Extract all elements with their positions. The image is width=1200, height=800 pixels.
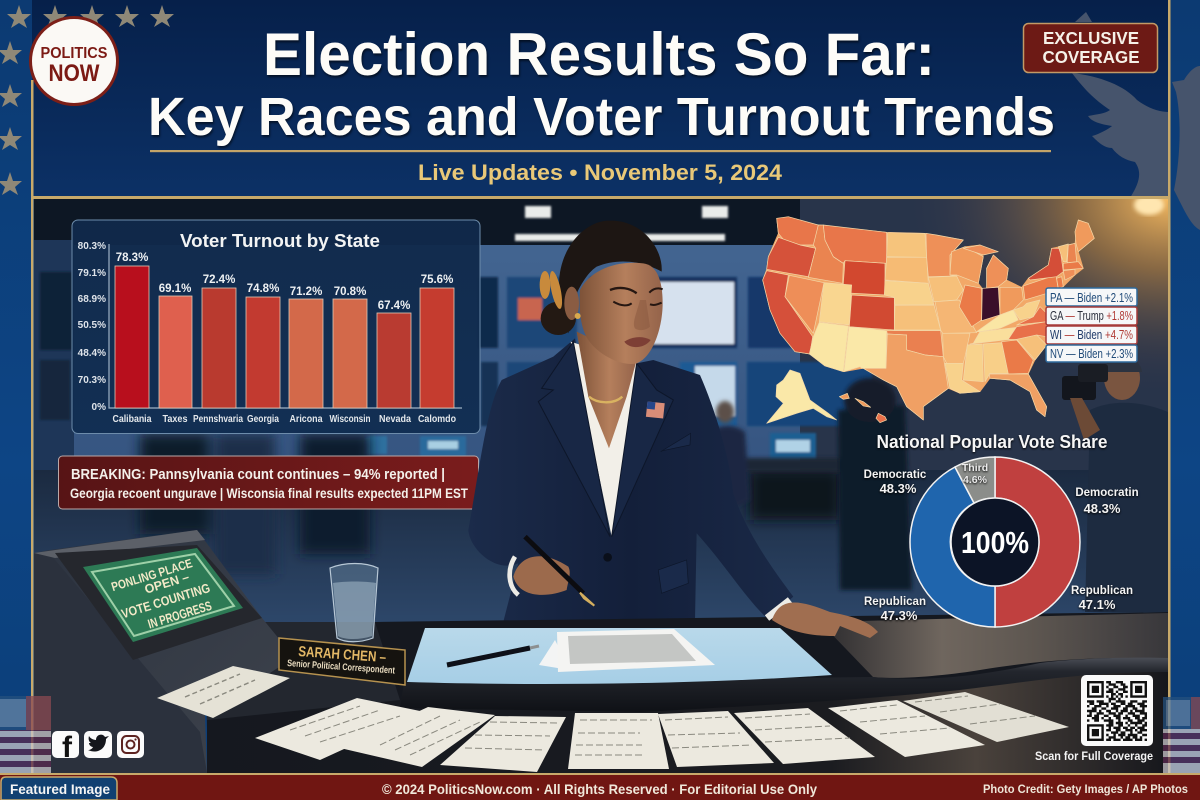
bars	[115, 266, 454, 408]
donut labels: Republican	[1071, 585, 1133, 597]
ballot 5	[658, 711, 774, 767]
bar category labels: Calomdo	[418, 414, 456, 425]
bar category labels: Taxes	[162, 414, 188, 425]
icon: instagram	[117, 731, 144, 758]
left cuff	[510, 557, 518, 595]
name plate: Sarah Chen: Senior Political Correspondent	[287, 658, 396, 677]
y axis labels: 70.3%	[78, 375, 106, 386]
donut labels	[864, 462, 1139, 623]
lamp	[1134, 195, 1164, 215]
bar value labels: 72.4%	[203, 274, 235, 286]
pen on glass	[447, 646, 539, 665]
necklace	[589, 397, 622, 402]
jacket	[468, 338, 793, 622]
status screen: VOTE COUNTING	[120, 580, 212, 621]
ballot 3	[440, 716, 566, 772]
status screen: PONLING PLACE	[110, 556, 194, 594]
title rule	[150, 150, 1051, 152]
name plate: Sarah Chen	[279, 638, 405, 685]
machine body	[34, 530, 290, 773]
earring	[575, 313, 581, 319]
presenter right hand	[767, 600, 878, 638]
flag: bottom left	[0, 696, 51, 773]
machine top edge	[34, 530, 205, 558]
ballots	[255, 692, 1069, 772]
bar value labels: 70.8%	[334, 286, 366, 298]
shirt	[571, 342, 637, 537]
footer tab: Featured Image	[10, 781, 110, 797]
bar value labels	[116, 252, 453, 312]
donut chart panel: national popular vote share	[864, 431, 1139, 627]
donut labels: Third	[962, 462, 988, 474]
y axis labels: 0%	[92, 402, 106, 413]
QR code	[1081, 675, 1153, 746]
donut labels: Republican	[864, 596, 926, 608]
desk shelf	[207, 670, 1168, 773]
logo: Politics Now	[30, 18, 118, 104]
breaking news ticker: Georgia recoent ungurave | Wisconsia final results expected 11PM EST	[70, 485, 468, 501]
title: Election Results So Far:	[263, 21, 935, 88]
ballot 7	[828, 700, 985, 757]
lapels	[538, 342, 673, 537]
badge: exclusive coverage: COVERAGE	[1042, 47, 1140, 67]
body front face	[34, 553, 207, 773]
bar value labels: 75.6%	[421, 274, 453, 286]
icon: facebook: f	[62, 731, 73, 764]
water glass	[330, 564, 378, 642]
left hand	[513, 556, 570, 595]
face	[580, 263, 663, 364]
machine bezel	[55, 545, 262, 660]
US turnout map	[763, 217, 1094, 423]
bar category labels: Nevada	[379, 414, 411, 425]
title: Key Races and Voter Turnout Trends	[148, 87, 1055, 147]
icon: decorative stars	[0, 5, 174, 195]
bar category labels: Calibania	[112, 414, 152, 425]
donut labels: 47.1%	[1079, 597, 1116, 612]
bar value labels: 71.2%	[290, 286, 322, 298]
ballot 1	[255, 698, 425, 760]
donut slices	[910, 457, 1080, 627]
y axis labels: 50.5%	[78, 320, 106, 331]
pocket	[658, 433, 691, 593]
flag: bottom right	[1163, 697, 1200, 773]
voting machine	[34, 530, 290, 773]
hair	[559, 221, 662, 333]
scene: newsroom photo	[34, 195, 1168, 640]
bar category labels	[112, 414, 456, 425]
y axis labels	[78, 241, 106, 413]
camera operator	[1062, 356, 1168, 612]
header band	[32, 0, 1170, 198]
footer copyright: © 2024 PoliticsNow.com · All Rights Reserved · For Editorial Use Only	[382, 781, 817, 797]
chart title: Voter Turnout by State	[180, 230, 380, 251]
y axis labels: 48.4%	[78, 348, 106, 359]
document on glass	[539, 629, 715, 672]
badge: exclusive coverage	[1024, 24, 1158, 72]
wall	[74, 245, 800, 466]
map base silhouette	[763, 218, 1094, 420]
callout: PA: PA — Biden +2.1%	[1050, 290, 1133, 305]
status screen	[83, 548, 243, 642]
donut labels: 4.6%	[963, 474, 988, 486]
donut labels: 48.3%	[880, 481, 917, 496]
QR caption: Scan for Full Coverage	[1035, 749, 1153, 763]
callout: NV: NV — Biden +2.3%	[1050, 346, 1133, 361]
mouth	[624, 337, 651, 347]
donut centre value: 100%	[961, 525, 1029, 560]
eyes	[610, 288, 663, 305]
title	[148, 21, 1055, 147]
ceiling lights	[515, 206, 728, 241]
desk upper frame	[375, 612, 1168, 700]
button	[603, 553, 612, 562]
right dark area	[800, 199, 1168, 470]
icon: eagle silhouette	[1072, 12, 1200, 230]
ballot 4	[568, 713, 669, 769]
bar chart panel: voter turnout by state	[72, 220, 480, 434]
pen	[525, 537, 583, 593]
icon: twitter	[84, 731, 112, 758]
logo: Politics Now: POLITICS	[40, 45, 108, 62]
nose shadow	[634, 300, 650, 330]
donut labels: Democratin	[1075, 487, 1139, 499]
name plate: Sarah Chen: SARAH CHEN –	[298, 644, 387, 666]
callout: GA: GA — Trump +1.8%	[1050, 308, 1133, 323]
donut labels: 48.3%	[1084, 501, 1121, 516]
logo: Politics Now: NOW	[48, 60, 100, 87]
ceiling	[34, 199, 800, 245]
status screen: OPEN –	[143, 570, 191, 597]
anchor desk	[205, 612, 1168, 773]
machine paper	[157, 666, 290, 718]
background desks and staff	[140, 434, 840, 574]
donut title: National Popular Vote Share	[876, 431, 1108, 452]
ballot 8	[903, 692, 1069, 742]
bar category labels: Wisconsin	[330, 414, 370, 425]
subtitle: Live Updates • November 5, 2024	[418, 160, 782, 185]
footer tab	[1, 777, 117, 800]
ear	[564, 287, 579, 320]
desk surface right	[820, 613, 1168, 678]
hair bun	[541, 302, 576, 335]
desk front band	[400, 658, 1168, 712]
bar category labels: Georgia	[247, 414, 279, 425]
y axis labels: 79.1%	[78, 268, 106, 279]
state result callouts	[1046, 288, 1137, 362]
bar category labels: Aricona	[290, 414, 323, 425]
background staff	[710, 378, 912, 590]
ballot 2	[340, 707, 495, 767]
ballot 6	[734, 708, 875, 764]
social icons	[52, 731, 144, 764]
donut labels: Democratic	[864, 469, 927, 481]
neck and chest	[577, 332, 637, 448]
footer credit: Photo Credit: Gety Images / AP Photos	[983, 782, 1188, 796]
bar value labels: 78.3%	[116, 252, 148, 264]
axes	[109, 244, 462, 408]
callout: WI: WI — Biden +4.7%	[1050, 327, 1133, 342]
glass monitor	[407, 628, 832, 684]
warm light glow	[952, 199, 1168, 360]
presenter: Sarah Chen	[468, 221, 793, 622]
desk left surface	[205, 622, 410, 730]
breaking news ticker	[58, 456, 478, 509]
bar value labels: 69.1%	[159, 283, 191, 295]
bar category labels: Pennshvaria	[193, 414, 243, 425]
y axis labels: 68.9%	[78, 294, 106, 305]
monitors	[40, 272, 872, 459]
footer bar	[0, 773, 1200, 800]
floor	[34, 470, 1158, 622]
bar value labels: 67.4%	[378, 300, 410, 312]
donut labels: 47.3%	[881, 608, 918, 623]
y axis labels: 80.3%	[78, 241, 106, 252]
badge: exclusive coverage: EXCLUSIVE	[1043, 28, 1139, 48]
status screen: IN PROGRESS	[146, 598, 214, 632]
hair clip	[540, 270, 565, 310]
flag pin	[646, 401, 665, 419]
breaking news ticker: BREAKING: Pannsylvania count continues – 94% reported |	[71, 466, 445, 483]
bar value labels: 74.8%	[247, 283, 279, 295]
left dark side	[34, 240, 74, 470]
